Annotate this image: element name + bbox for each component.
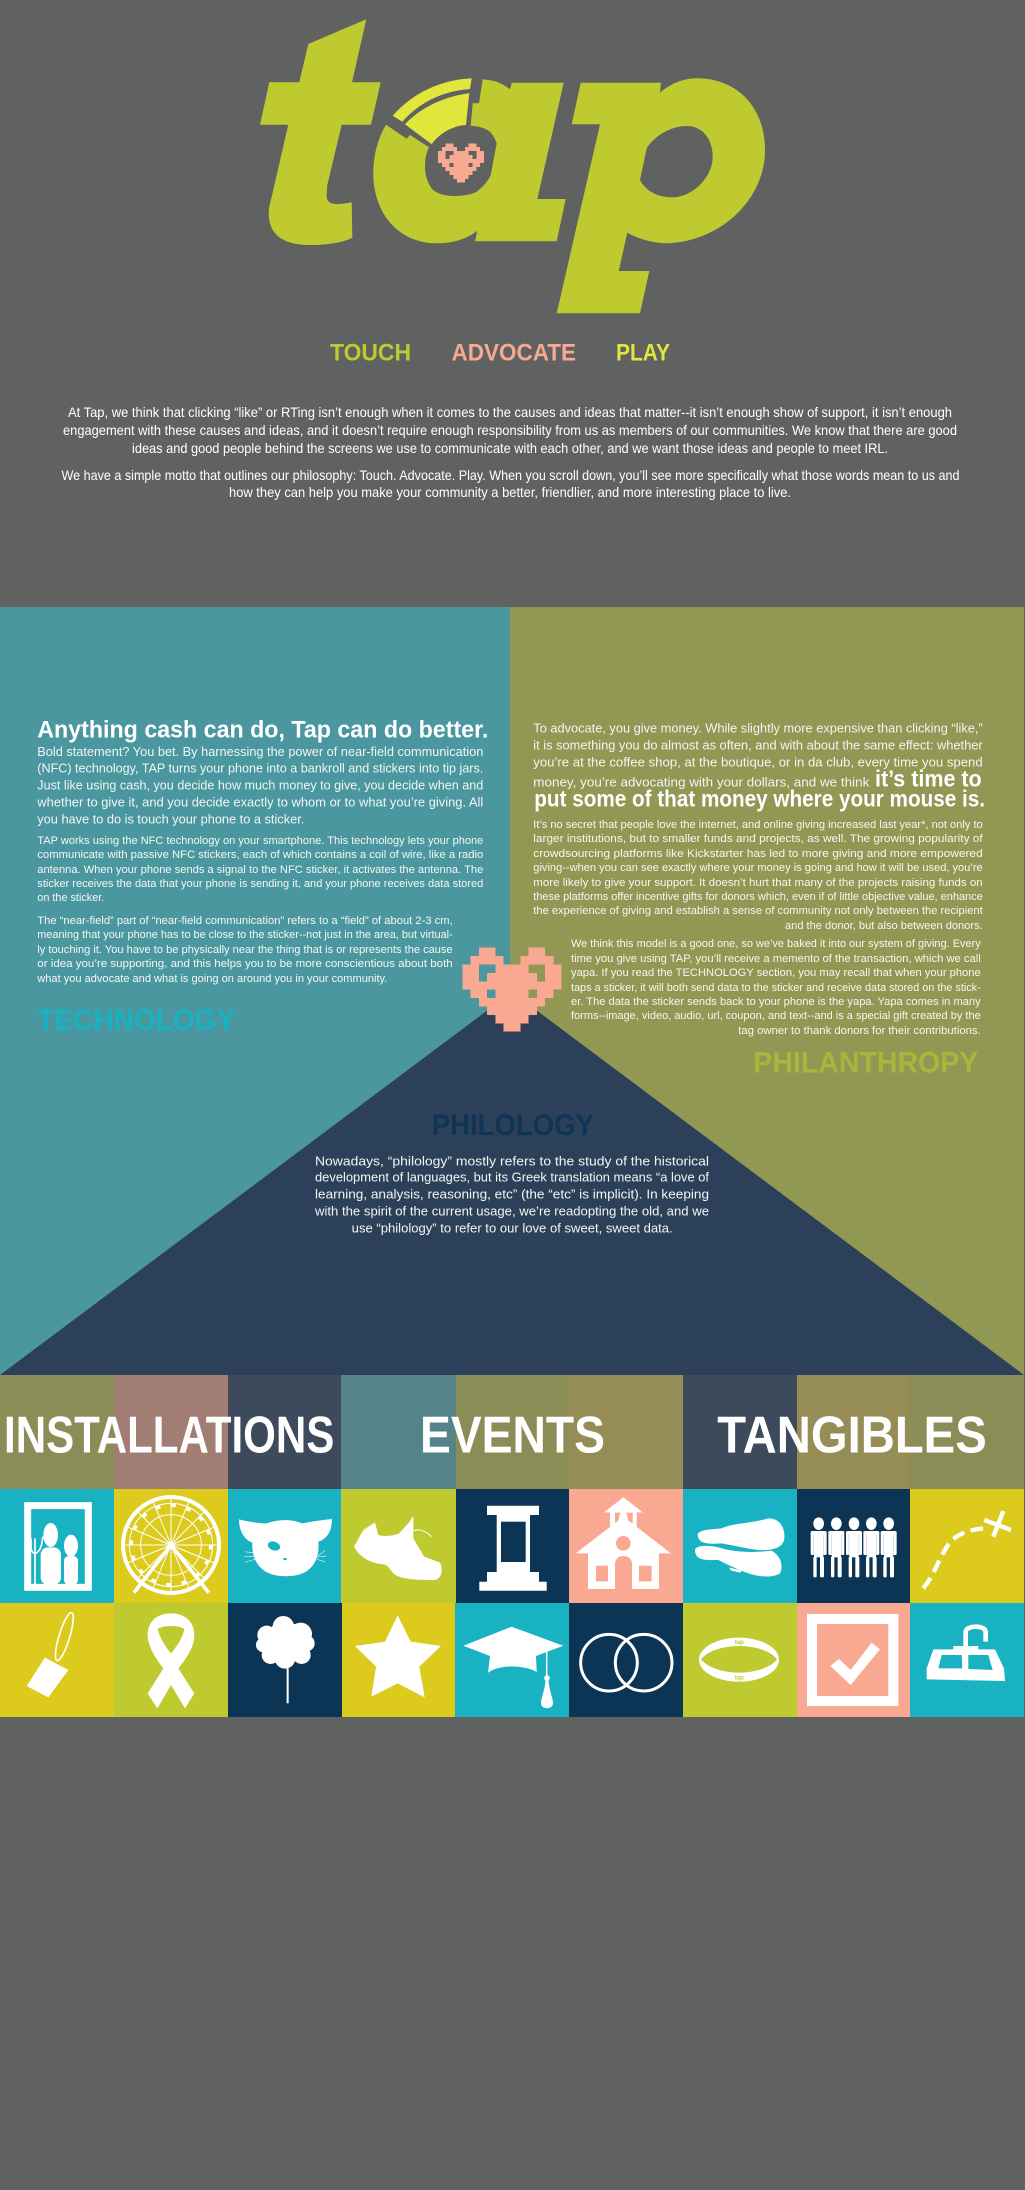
icon: awareness ribbon bbox=[148, 1613, 194, 1708]
technology paragraph 2 bbox=[37, 835, 483, 904]
philanthropy paragraph 3 bbox=[571, 938, 981, 1037]
icon tile backgrounds row 1 bbox=[0, 1489, 1024, 1603]
philanthropy paragraph 3: time you give using TAP, you’ll receive a memento of the transaction, which we call bbox=[571, 953, 981, 965]
philology paragraph: with the spirit of the current usage, we’re readopting the old, and we bbox=[314, 1204, 709, 1219]
philology label: PHILOLOGY bbox=[432, 1109, 594, 1142]
icon: pillar bbox=[479, 1506, 547, 1591]
philanthropy paragraph 3: er. The data the sticker sends back to your phone is the yapa. Yapa comes in many bbox=[571, 996, 981, 1008]
icon: star bbox=[355, 1615, 441, 1697]
icon: cotton candy bbox=[256, 1616, 315, 1703]
technology paragraph 3 bbox=[36, 915, 453, 985]
technology paragraph 2: communicate with passive NFC stickers, each of which contains a coil of wire, like a radio bbox=[37, 849, 483, 861]
technology paragraph 3: ly touching it. You have to be physically near the thing that is or represents the cause bbox=[37, 944, 453, 956]
logo letter p bbox=[557, 78, 765, 313]
panel: philanthropy background bbox=[510, 607, 1024, 1375]
icon: collection tray bbox=[927, 1627, 1005, 1681]
panel: technology text bbox=[36, 717, 488, 1037]
icon: checkbox bbox=[812, 1619, 893, 1701]
philanthropy label: PHILANTHROPY bbox=[753, 1047, 978, 1080]
technology paragraph 1: you have to do is touch your phone to a sticker. bbox=[37, 811, 304, 826]
heading: events: EVENTS bbox=[420, 1407, 605, 1465]
header band tiles bbox=[0, 1375, 1024, 1489]
philanthropy paragraph 1: To advocate, you give money. While slightly more expensive than clicking “like,” bbox=[533, 721, 983, 736]
panel: philology text bbox=[314, 1109, 709, 1236]
technology paragraph 2: antenna. When your phone sends a signal to the NFC sticker, it activates the antenna. The bbox=[37, 864, 483, 876]
icon: ferris wheel bbox=[123, 1497, 219, 1593]
technology paragraph 3: what you advocate and what is going on around you in your community. bbox=[36, 973, 387, 985]
philanthropy paragraph 2: and the donor, but also between donors. bbox=[785, 920, 983, 932]
intro text: At Tap, we think that clicking “like” or RTing isn’t enough when it comes to the causes and ideas that matter--it isn’t enough show of support, it isn’t enough bbox=[68, 404, 952, 420]
icon: shoe bbox=[354, 1516, 442, 1580]
philanthropy paragraph 3: We think this model is a good one, so we’ve baked it into our system of giving. Every bbox=[571, 938, 981, 950]
technology paragraph 2: TAP works using the NFC technology on your smartphone. This technology lets your phone bbox=[37, 835, 483, 847]
heading: tangibles: TANGIBLES bbox=[717, 1407, 987, 1465]
icon: wristband: tap bbox=[735, 1640, 744, 1646]
icon: wristband bbox=[699, 1638, 779, 1682]
philanthropy paragraph 2: the experience of giving and establish a sense of community not only between the recipient bbox=[533, 905, 983, 917]
philanthropy paragraph 1: it is something you do almost as often, and with about the same effect: whether bbox=[533, 738, 983, 753]
tagline: touch advocate play bbox=[330, 340, 670, 366]
panel: technology background bbox=[0, 607, 510, 1375]
intro text: ideas and good people behind the screens we use to communicate with each other, and we want those ideas and people to meet IRL. bbox=[132, 440, 888, 456]
philology paragraph bbox=[314, 1154, 709, 1236]
philanthropy paragraph 2: larger institutions, but to smaller funds and projects, as well. The growing popularity of bbox=[533, 833, 984, 845]
logo signal arc outer bbox=[393, 78, 472, 122]
philanthropy paragraph 2: It’s no secret that people love the internet, and online giving increased last year*, not only to bbox=[533, 819, 983, 831]
icon: wristband: tap bbox=[735, 1676, 744, 1682]
technology paragraph 3: meaning that your phone has to be close to the sticker--not just in the area, but virtual- bbox=[37, 929, 453, 941]
tagline word touch: TOUCH bbox=[330, 340, 411, 366]
icon: row of people bbox=[811, 1517, 897, 1577]
icon: instrument cases bbox=[695, 1518, 784, 1576]
philanthropy paragraph 2: crowdsourcing platforms like Kickstarter has led to more giving and more empowered bbox=[533, 848, 983, 860]
icon: graduation cap bbox=[463, 1627, 563, 1708]
philology paragraph: Nowadays, “philology” mostly refers to the study of the historical bbox=[315, 1154, 709, 1169]
icon: luggage tag bbox=[27, 1611, 77, 1697]
technology paragraph 3: The “near-field” part of “near-field communication” refers to a “field” of about 2-3 cm, bbox=[37, 915, 453, 927]
icon: large pixel heart bbox=[462, 948, 562, 1032]
philology paragraph: learning, analysis, reasoning, etc” (the “etc” is implicit). In keeping bbox=[315, 1187, 709, 1202]
panel: philanthropy text bbox=[533, 721, 985, 1080]
philanthropy paragraph 1: put some of that money where your mouse is. bbox=[534, 786, 985, 812]
philanthropy paragraph 3: taps a sticker, it will both send data to the sticker and receive data stored on the stick- bbox=[571, 982, 981, 994]
logo signal arc inner bbox=[405, 93, 469, 144]
icon: schoolhouse bbox=[576, 1497, 671, 1589]
icon: wedding rings bbox=[581, 1634, 672, 1691]
philanthropy paragraph 2: giving--when you can see exactly where your money is going and how it will be used, you’re bbox=[533, 862, 983, 874]
logo: tap wordmark bbox=[260, 19, 765, 313]
philanthropy paragraph 2: more likely to give your support. It doesn’t hurt that many of the projects raising funds on bbox=[533, 877, 983, 889]
technology paragraph 1 bbox=[36, 744, 483, 826]
icons: right half of grid bbox=[576, 1497, 1011, 1701]
panel: philology triangle bbox=[0, 992, 1024, 1375]
icons: left half of grid bbox=[27, 1497, 442, 1708]
philanthropy paragraph 3: tag owner to thank donors for their contributions. bbox=[738, 1025, 981, 1037]
technology paragraph 2: sticker receives the data that your phone is sending it, and your phone receives data stored bbox=[37, 878, 483, 890]
logo letter a bbox=[373, 79, 566, 243]
intro text: engagement with these causes and ideas, and it doesn’t require enough responsibility from us as members of our communities. We know that there are good bbox=[63, 422, 957, 438]
technology paragraph 2: on the sticker. bbox=[37, 892, 104, 904]
philanthropy paragraph 1: you’re at the coffee shop, at the boutique, or in da club, every time you spend bbox=[533, 755, 983, 770]
icon: treasure map path bbox=[923, 1511, 1011, 1588]
technology label: TECHNOLOGY bbox=[37, 1004, 235, 1037]
heading: installations: INSTALLATIONS bbox=[4, 1407, 334, 1465]
philanthropy paragraph 2 bbox=[533, 819, 984, 932]
technology paragraph 1: Just like using cash, you decide how much money to give, you decide when and bbox=[37, 777, 483, 792]
technology paragraph 1: (NFC) technology, TAP turns your phone into a bankroll and stickers into tip jars. bbox=[37, 760, 483, 776]
philanthropy paragraph 1: it’s time to bbox=[875, 766, 982, 792]
philology paragraph: development of languages, but its Greek translation means “a love of bbox=[315, 1170, 709, 1185]
icon: small pixel heart bbox=[438, 143, 484, 183]
philanthropy paragraph 2: these platforms offer incentive gifts for donors which, even if of little objective value, enhance bbox=[533, 891, 983, 903]
intro text: how they can help you make your community a better, friendlier, and more interesting place to live. bbox=[229, 484, 791, 500]
icon: pillar opening bbox=[501, 1522, 526, 1562]
philanthropy paragraph 3: yapa. If you read the TECHNOLOGY section, you may recall that when your phone bbox=[571, 967, 981, 979]
tagline word advocate: ADVOCATE bbox=[452, 340, 576, 366]
technology paragraph 3: or idea you’re supporting, and this helps you to be more conscientious about both bbox=[37, 958, 453, 970]
icon: cat face bbox=[239, 1519, 332, 1576]
icon tile backgrounds row 2 bbox=[0, 1603, 1024, 1717]
philanthropy paragraph 1 bbox=[533, 721, 985, 812]
philanthropy paragraph 3: forms--image, video, audio, url, coupon, and text--and is a special gift created by the bbox=[571, 1010, 981, 1022]
technology paragraph 1: Bold statement? You bet. By harnessing the power of near-field communication bbox=[37, 744, 483, 759]
philanthropy paragraph 1: money, you’re advocating with your dollars, and we think bbox=[533, 775, 870, 790]
logo letter t bbox=[260, 19, 381, 245]
icon: framed family bbox=[28, 1506, 88, 1587]
philology paragraph: use “philology” to refer to our love of sweet, sweet data. bbox=[352, 1221, 673, 1236]
tagline word play: PLAY bbox=[616, 340, 670, 366]
intro text bbox=[62, 404, 960, 500]
technology paragraph 1: whether to give it, and you decide exactly to whom or to what you’re giving. All bbox=[36, 794, 483, 809]
technology heading: Anything cash can do, Tap can do better. bbox=[37, 717, 488, 744]
